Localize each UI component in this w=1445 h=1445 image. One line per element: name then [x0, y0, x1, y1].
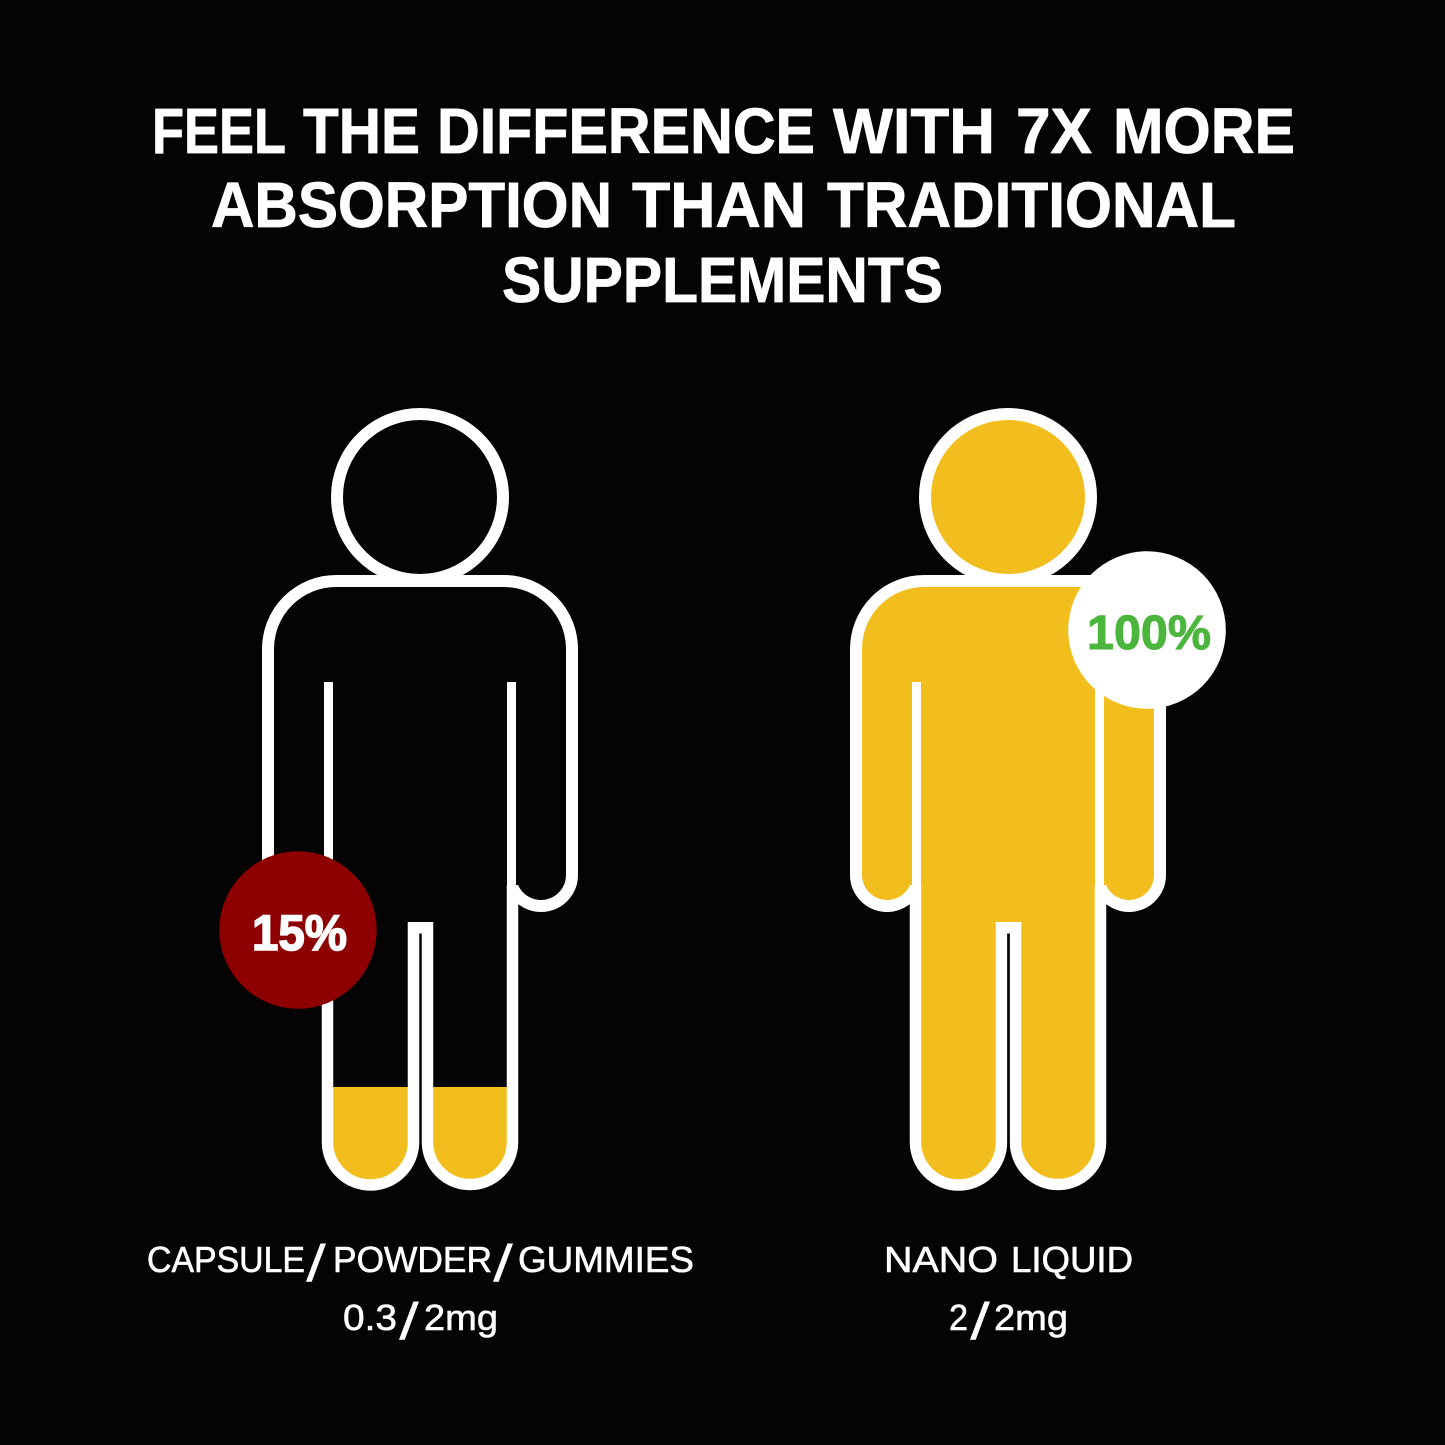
- leg gap notch: [1007, 934, 1010, 1148]
- outline: right figure legs: [916, 885, 1100, 1185]
- title: THAN: [632, 169, 806, 241]
- badge: 100%: 100%: [1087, 607, 1211, 660]
- label: capsule/powder/gummies: /: [399, 1293, 420, 1351]
- outline: right figure inner arm lines: [912, 682, 1104, 885]
- badge: 15%: [219, 851, 377, 1009]
- panel: nano liquid figure: [856, 414, 1226, 1351]
- label: capsule/powder/gummies: 0.3: [343, 1297, 397, 1338]
- title: DIFFERENCE: [437, 95, 815, 167]
- outline: left figure legs: [328, 885, 512, 1185]
- title: [152, 95, 1295, 316]
- label: capsule/powder/gummies: /: [306, 1235, 327, 1293]
- label: nano liquid: /: [970, 1293, 991, 1351]
- title: SUPPLEMENTS: [502, 244, 943, 316]
- label: nano liquid: 2mg: [994, 1297, 1068, 1338]
- outline: left figure inner arm lines: [324, 682, 516, 885]
- panel: capsule/powder/gummies figure: [147, 414, 694, 1351]
- label: capsule/powder/gummies: /: [493, 1235, 514, 1293]
- label: capsule/powder/gummies: [147, 1235, 694, 1351]
- title: MORE: [1113, 95, 1295, 167]
- outline: right figure body and arms: [856, 581, 1160, 906]
- head outline: [337, 414, 503, 580]
- label: nano liquid: LIQUID: [1011, 1239, 1133, 1280]
- head filled: [925, 414, 1091, 580]
- badge: 100%: [1068, 551, 1226, 709]
- label: nano liquid: NANO: [884, 1239, 998, 1280]
- label: nano liquid: [884, 1239, 1133, 1351]
- title: THE: [303, 95, 420, 167]
- yellow fill: left figure legs at 15%: [328, 1087, 512, 1185]
- outline: left figure body and arms: [268, 581, 572, 906]
- title: FEEL: [152, 95, 286, 167]
- title: TRADITIONAL: [827, 169, 1236, 241]
- title: WITH: [833, 95, 995, 167]
- label: capsule/powder/gummies: CAPSULE: [147, 1239, 305, 1280]
- label: nano liquid: 2: [949, 1297, 968, 1338]
- label: capsule/powder/gummies: GUMMIES: [518, 1239, 694, 1280]
- yellow body fill: [856, 581, 1160, 1185]
- label: capsule/powder/gummies: 2mg: [424, 1297, 498, 1338]
- title: ABSORPTION: [211, 169, 612, 241]
- label: capsule/powder/gummies: POWDER: [333, 1239, 492, 1280]
- title: 7X: [1016, 95, 1092, 167]
- badge: 15%: 15%: [252, 905, 347, 961]
